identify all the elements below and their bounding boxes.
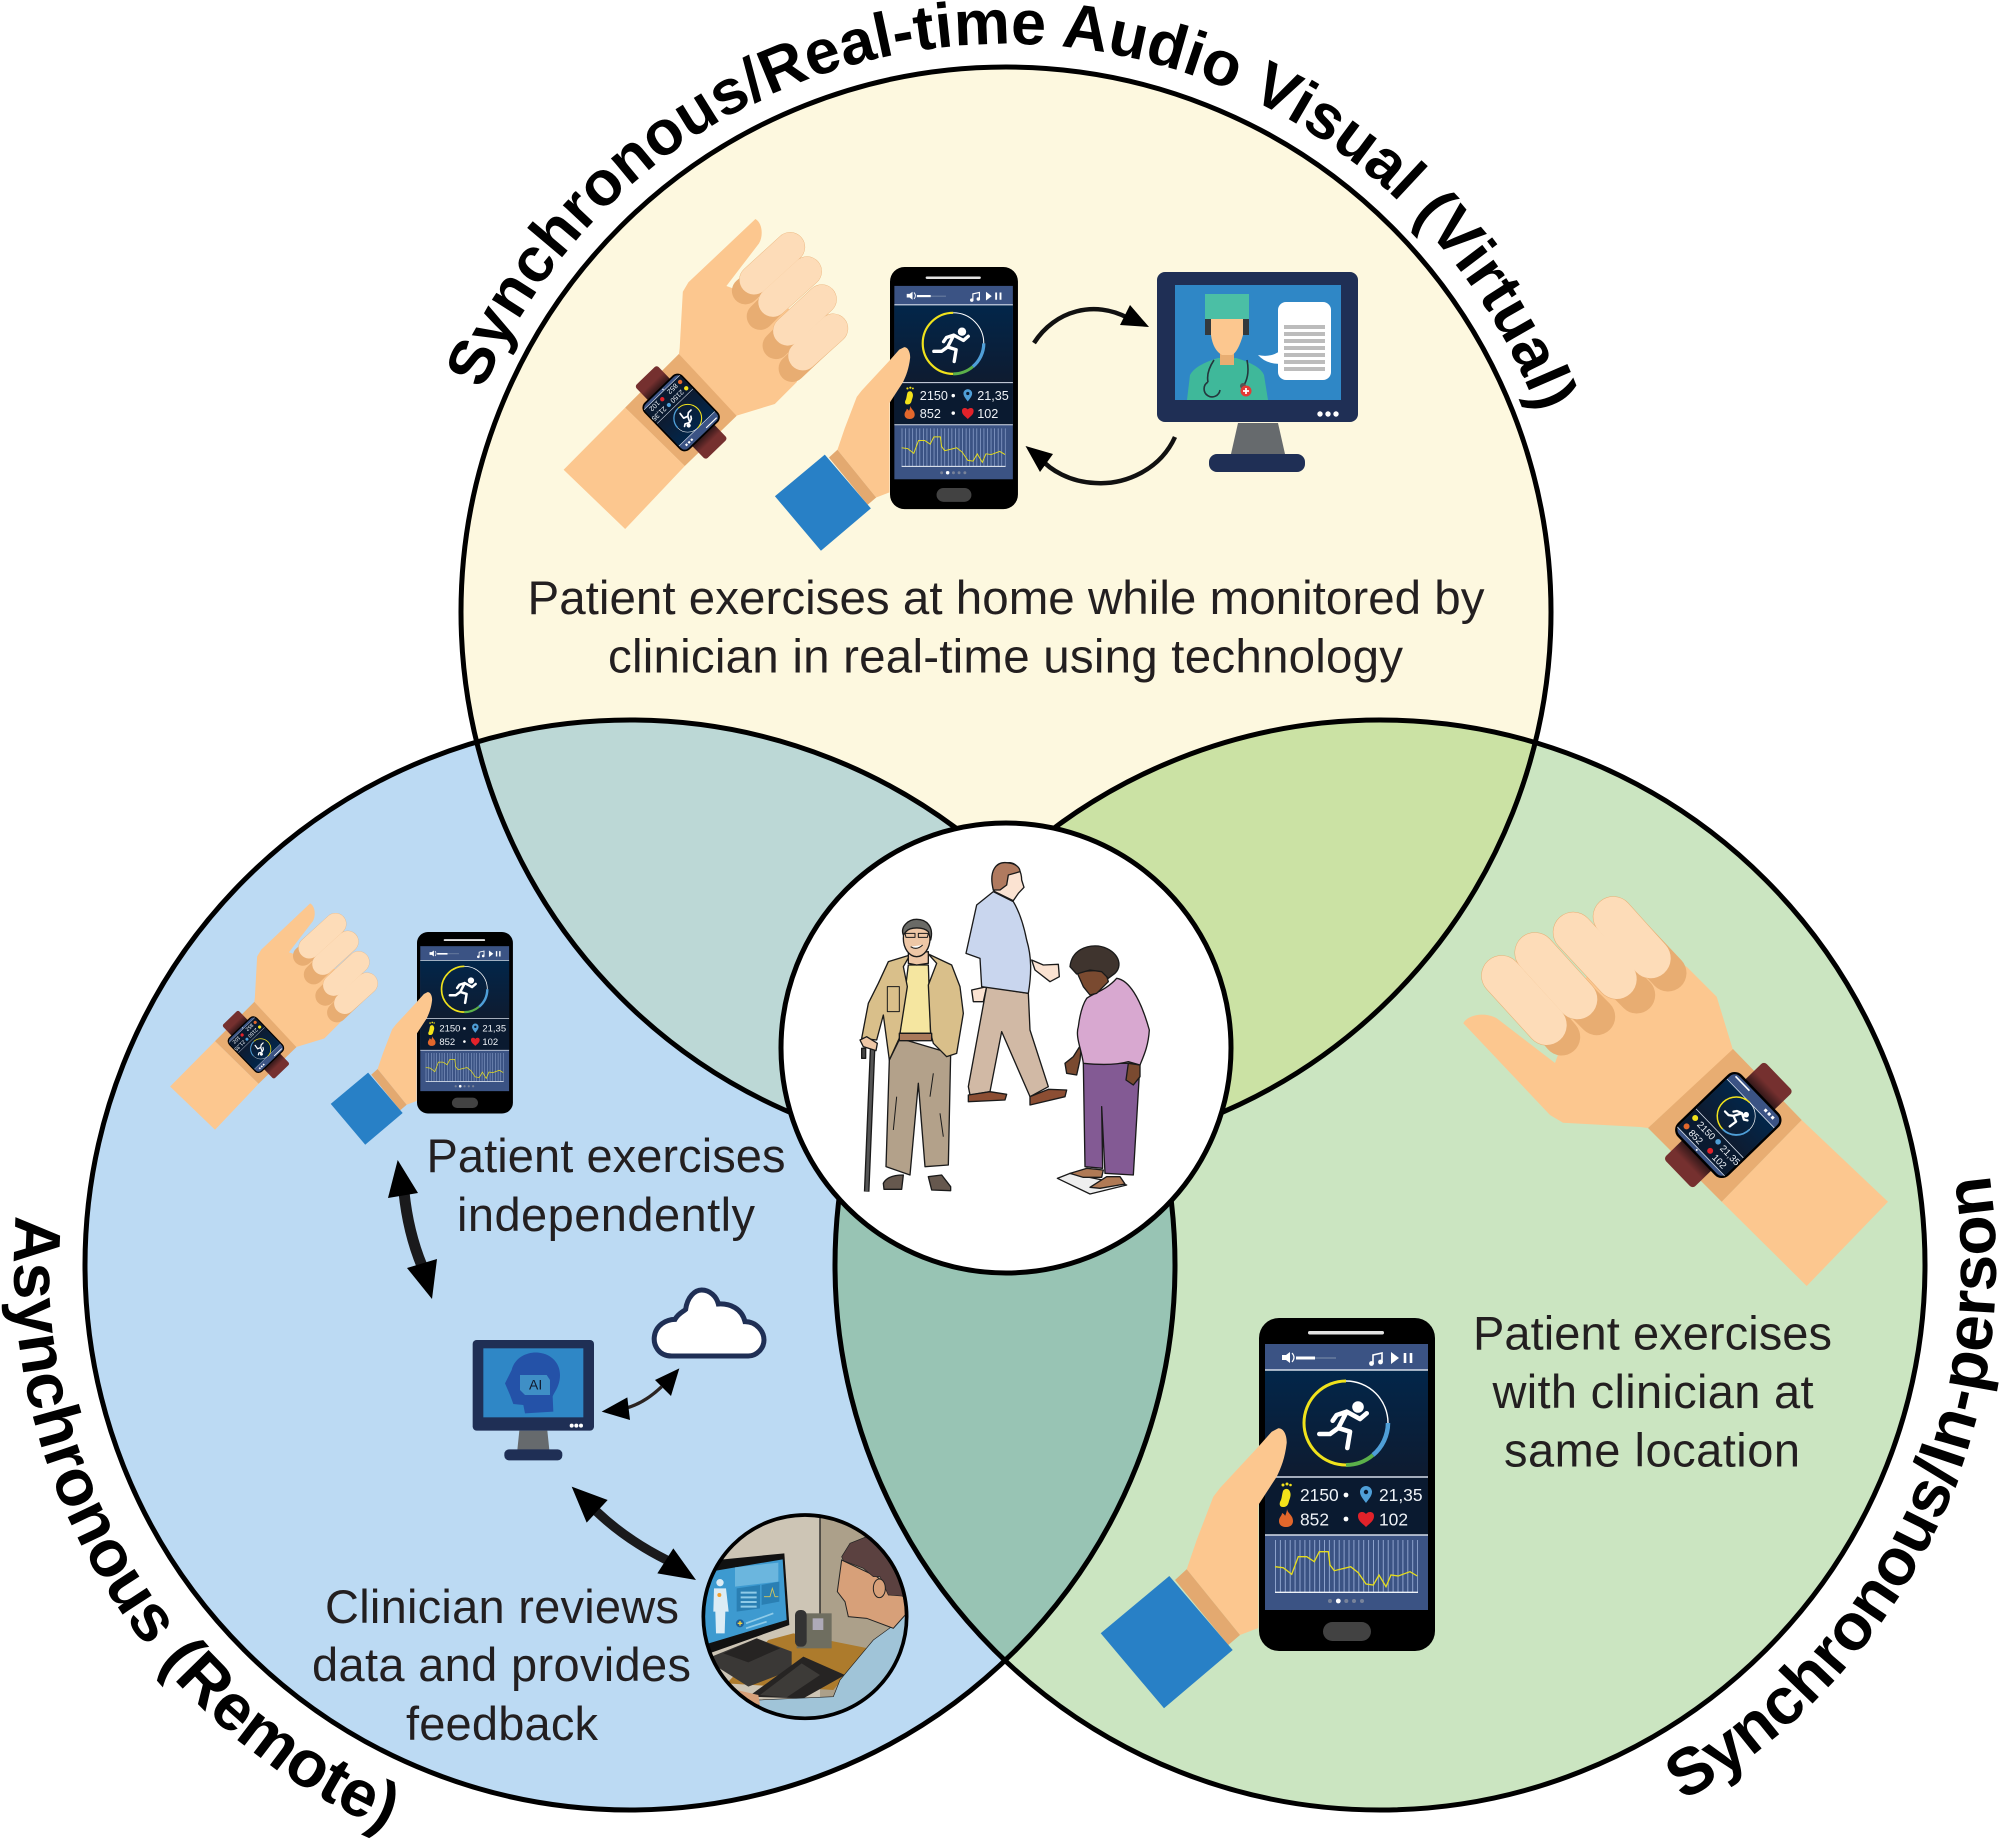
arrow: AI monitor to clinician: [572, 1487, 696, 1580]
icon: top phone held in hand: 2150: [920, 389, 948, 403]
heading: Synchronous/In-person: Synchronous/In-person: [1668, 1178, 1999, 1795]
panel: synchronous in-person circle: [835, 720, 1925, 1810]
overlap: top and left: [480, 722, 950, 1108]
arrow: clinician monitor to phone: [1026, 437, 1175, 483]
icon: left phone held in hand: 852: [439, 1037, 455, 1048]
text: patient exercises independently: Patient exercises: [426, 1129, 786, 1182]
icon: right wrist with smartwatch: 21,35: [1717, 1143, 1742, 1168]
icon: top wrist with smartwatch: 21,35: [650, 405, 667, 422]
icon: left wrist with smartwatch: 21,35: [232, 1038, 246, 1052]
panel: synchronous real-time audio visual circle: [461, 67, 1551, 1157]
icon: left phone held in hand: 21,35: [482, 1024, 506, 1035]
text: patient exercises at home: Patient exercises at home while monitored by: [528, 572, 1485, 625]
text: patient exercises at home: clinician in real-time using technology: [608, 630, 1403, 684]
text: patient exercises with clinician: same location: [1504, 1424, 1800, 1476]
icon: monitor with clinician on screen: [1157, 272, 1358, 472]
arrow: phone to clinician monitor: [1034, 305, 1149, 343]
icon: top wrist with smartwatch: 102: [647, 399, 661, 412]
icon: right phone held in hand: 102: [1379, 1510, 1408, 1530]
icon: left phone held in hand: 2150: [439, 1024, 460, 1035]
icon: right phone held in hand: 2150: [1300, 1485, 1339, 1505]
icon: right phone held in hand: 21,35: [1379, 1485, 1423, 1505]
illustration: clinician at desk: [700, 1513, 913, 1727]
text: patient exercises with clinician: with clinician at: [1492, 1365, 1814, 1418]
icon: right wrist with smartwatch: 2150: [1694, 1120, 1717, 1143]
overlap: left and right: [838, 1204, 1172, 1657]
illustration: woman on scale: [1057, 946, 1149, 1194]
icon: right phone held in hand: [1101, 1318, 1435, 1708]
icon: top phone held in hand: 21,35: [977, 389, 1009, 403]
icon: right wrist with smartwatch: 852: [1686, 1128, 1705, 1147]
overlap: top and right: [1060, 722, 1532, 1108]
text: patient exercises at home: [528, 572, 1485, 684]
icon: top phone held in hand: 102: [977, 407, 998, 421]
icon: left wrist with smartwatch: 852: [244, 1022, 254, 1032]
icon: left phone held in hand: [331, 932, 513, 1145]
icon: right phone held in hand: 852: [1300, 1510, 1329, 1530]
icon: top wrist with smartwatch: 852: [665, 381, 678, 395]
panel: asynchronous remote circle: [85, 720, 1175, 1810]
heading: Asynchronous (Remote): Asynchronous (Remote): [2, 1217, 396, 1838]
illustration: older man with cane: [860, 919, 963, 1192]
text: clinician reviews data: data and provides: [312, 1638, 691, 1691]
icon: AI monitor: AI: [529, 1376, 542, 1392]
panel: centre circle with patients: [781, 823, 1231, 1273]
arrow: AI monitor to cloud: [602, 1368, 679, 1420]
lower-left group: monitor, cloud, arrows, clinician: [473, 1290, 913, 1727]
icon: cloud: [654, 1290, 764, 1356]
icon: left wrist with smartwatch: 102: [231, 1034, 241, 1045]
icon: AI monitor: [473, 1340, 594, 1460]
illustration: man walking: [966, 863, 1067, 1105]
text: patient exercises with clinician: [1473, 1306, 1832, 1476]
icon: left wrist with smartwatch: [170, 903, 367, 1130]
icon: top wrist with smartwatch: [564, 219, 833, 529]
heading: Synchronous/Real-time Audio Visual (Virtual): Synchronous/Real-time Audio Visual (Virtual): [449, 1, 1576, 408]
text: clinician reviews data: [312, 1580, 691, 1750]
icon: top wrist with smartwatch: 2150: [668, 388, 685, 404]
icon: top phone held in hand: 852: [920, 407, 941, 421]
icon: left phone held in hand: 102: [482, 1037, 498, 1048]
text: clinician reviews data: Clinician reviews: [325, 1580, 679, 1633]
text: patient exercises independently: independently: [457, 1188, 756, 1241]
icon: right wrist with smartwatch: [1463, 917, 1888, 1286]
text: clinician reviews data: feedback: [406, 1697, 598, 1750]
icon: left wrist with smartwatch: 2150: [246, 1026, 259, 1039]
text: patient exercises independently: [426, 1129, 786, 1241]
icon: right wrist with smartwatch: 102: [1709, 1152, 1728, 1172]
icon: top phone held in hand: [775, 267, 1018, 551]
text: patient exercises with clinician: Patient exercises: [1473, 1306, 1832, 1360]
arrow: phone to AI monitor: [388, 1160, 437, 1299]
